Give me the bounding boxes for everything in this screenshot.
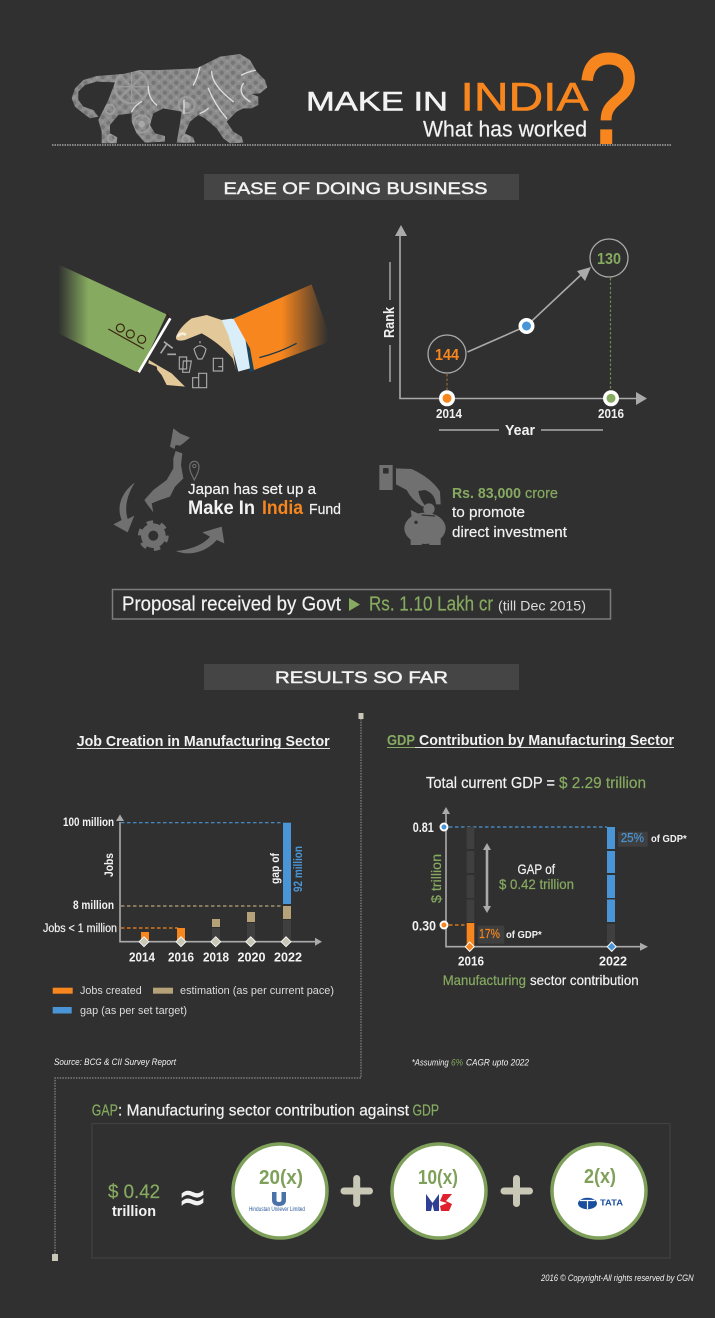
- chart: rank line chart: [381, 225, 647, 439]
- label: 25 percent of gdp: 25%: [621, 830, 644, 845]
- year labels: 2016: [168, 950, 194, 965]
- y-axis labels: 0.81: [413, 819, 434, 835]
- subtitle: What has worked: [423, 116, 587, 142]
- value: 0.42 trillion: $ 0.42: [108, 1182, 160, 1203]
- x-axis diamonds: [139, 937, 291, 947]
- dotted connector: [52, 713, 364, 1261]
- text: rs 83,000 crore: crore: [525, 485, 558, 502]
- heading: job creation: Job Creation in Manufacturing Sector: [77, 733, 330, 750]
- value: 130: [590, 239, 628, 277]
- y-axis labels: [43, 817, 117, 935]
- y-axis labels: Jobs < 1 million: [43, 923, 117, 935]
- symbol: plus: [344, 1178, 370, 1204]
- text: japan has set up a make in india fund: Make In: [188, 498, 255, 519]
- axis caption: Manufacturing: [443, 972, 526, 988]
- text: total current gdp: [426, 775, 646, 792]
- text: gap of 0.42 trillion: [499, 861, 574, 892]
- label 2016: 2016: [598, 406, 624, 421]
- source note: Source: BCG & CII Survey Report: [54, 1057, 176, 1068]
- gap annotation: gap of: [270, 853, 282, 884]
- right hand: [176, 315, 237, 372]
- legend: Jobs created: [80, 985, 142, 997]
- heading: gap: GDP: [412, 1103, 439, 1120]
- bars: [141, 823, 291, 940]
- text: total current gdp: $ 2.29 trillion: [559, 775, 646, 792]
- year labels: 2022: [599, 954, 627, 969]
- point markers: [440, 822, 616, 951]
- text: japan has set up a make in india fund: Fund: [309, 501, 341, 518]
- double arrow: [483, 843, 491, 913]
- logo: tata: TATA: [600, 1198, 623, 1208]
- text: total current gdp: Total current GDP =: [426, 775, 555, 792]
- heading: gdp contribution: Contribution by Manufacturing Sector: [419, 732, 674, 749]
- header: [72, 52, 635, 144]
- axes: [442, 807, 648, 951]
- midpoint marker: [518, 318, 534, 334]
- bar 2016: [467, 827, 474, 946]
- axis label: rank: Rank: [381, 306, 398, 338]
- text: rs 83,000 crore: direct investment: [452, 524, 568, 541]
- green sleeve: [58, 264, 170, 373]
- callout: proposal received: Rs. 1.10 Lakh cr: [369, 594, 493, 616]
- y-axis labels: [412, 819, 436, 934]
- panel: gdp contribution: [387, 732, 687, 1069]
- circle: maruti suzuki: 10(x): [418, 1167, 458, 1189]
- callout: proposal received: Proposal received by Govt: [122, 594, 341, 616]
- label: 17 percent of gdp: [478, 926, 542, 944]
- value: 144: 144: [435, 347, 459, 364]
- symbol: plus: [504, 1178, 530, 1204]
- label: 17 percent of gdp: of GDP*: [506, 930, 542, 941]
- text: japan has set up a make in india fund: Japan has set up a: [188, 481, 317, 498]
- heading: gap: GAP: [92, 1103, 118, 1120]
- circle: tata: [552, 1144, 646, 1238]
- title: make in india: INDIA: [460, 76, 589, 120]
- legend: estimation (as per current pace): [180, 985, 334, 997]
- icon: gear lion: [70, 52, 270, 145]
- year labels: 2018: [203, 950, 229, 965]
- text: japan has set up a make in india fund: India: [262, 498, 303, 519]
- block: direct investment: [379, 465, 568, 545]
- text: rs 83,000 crore: to promote: [452, 504, 525, 521]
- chart axes: [395, 225, 647, 405]
- value: 0.42 trillion: [108, 1182, 160, 1220]
- axis label: rank: [381, 262, 398, 382]
- orange sleeve: [222, 284, 332, 372]
- rank arrow line: [468, 267, 591, 352]
- logo: unilever: Hindustan Unilever Limited: [249, 1207, 305, 1213]
- value: 130: 130: [597, 251, 621, 268]
- label: 17 percent of gdp: 17%: [479, 926, 500, 941]
- footnote: 6%: [451, 1058, 463, 1069]
- text: rs 83,000 crore: [452, 485, 568, 541]
- marker 2014: [439, 390, 455, 406]
- year labels: 2022: [274, 950, 302, 965]
- block: japan fund: [113, 428, 341, 553]
- logo: maruti suzuki: [426, 1194, 452, 1211]
- heading: gap: : Manufacturing sector contribution against: [118, 1103, 410, 1120]
- heading: results so far: [204, 664, 519, 690]
- axis label: year: Year: [505, 422, 535, 439]
- circle: hindustan unilever: 20(x): [259, 1167, 303, 1189]
- business icons: [161, 341, 223, 388]
- icon: japan map and gear cycle: [113, 428, 224, 553]
- icon: handshake: [58, 264, 332, 388]
- axis caption: [443, 972, 639, 988]
- footnote: [412, 1058, 530, 1069]
- text: rs 83,000 crore: Rs. 83,000: [452, 485, 521, 502]
- panel: job creation: [43, 733, 334, 1068]
- circle: tata: 2(x): [584, 1166, 616, 1188]
- axis label: trillion: $ trillion: [428, 854, 444, 903]
- label: 25 percent of gdp: [618, 830, 687, 847]
- icon: hand and piggy bank: [379, 465, 446, 545]
- bar 2022: [607, 827, 615, 943]
- symbol: approximately: ≈: [178, 1175, 207, 1219]
- year labels: 2016: [458, 954, 484, 969]
- y-axis labels: 100 million: [63, 817, 114, 829]
- heading: gdp contribution: GDP: [387, 732, 415, 749]
- value: 0.42 trillion: trillion: [112, 1203, 156, 1220]
- gap annotation: [270, 846, 305, 892]
- year labels: 2020: [238, 950, 266, 965]
- axis label: jobs: Jobs: [102, 853, 116, 877]
- callout: proposal received: (till Dec 2015): [498, 598, 586, 614]
- heading: ease of doing business: [204, 174, 519, 200]
- year labels: [458, 954, 627, 969]
- bar chart: gdp: [412, 807, 687, 988]
- bar chart: jobs: [43, 814, 322, 965]
- footnote: CAGR upto 2022: [466, 1058, 530, 1069]
- legend: [53, 985, 334, 1017]
- title: make in india: MAKE IN: [306, 86, 448, 116]
- y-axis labels: 8 million: [73, 900, 114, 912]
- text: gap of 0.42 trillion: $ 0.42 trillion: [499, 876, 574, 892]
- heading: results so far: RESULTS SO FAR: [275, 668, 448, 687]
- marker 2016: [603, 390, 619, 406]
- legend: gap (as per set target): [80, 1005, 187, 1017]
- y-axis labels: 0.30: [412, 918, 436, 934]
- heading: ease of doing business: EASE OF DOING BUSINESS: [224, 179, 488, 198]
- axis caption: sector contribution: [530, 972, 639, 988]
- circle: hindustan unilever: [233, 1144, 327, 1238]
- label 2014: 2014: [436, 406, 463, 421]
- title: question mark: ?: [578, 28, 638, 171]
- callout: proposal received: [112, 590, 610, 619]
- label: 25 percent of gdp: of GDP*: [651, 834, 687, 845]
- year labels: 2014: [129, 950, 156, 965]
- value: 144: [428, 335, 466, 373]
- circle: maruti suzuki: [392, 1144, 486, 1238]
- axes: [116, 814, 322, 946]
- footnote: *Assuming: [412, 1058, 449, 1069]
- lower hand: [148, 360, 185, 387]
- title: make in india: [306, 76, 589, 120]
- gap annotation: 92 million: [291, 846, 305, 892]
- year labels: [129, 950, 302, 965]
- text: japan has set up a make in india fund: [188, 481, 341, 519]
- text: gap of 0.42 trillion: GAP of: [518, 861, 555, 877]
- panel: gap comparison: [92, 1103, 670, 1258]
